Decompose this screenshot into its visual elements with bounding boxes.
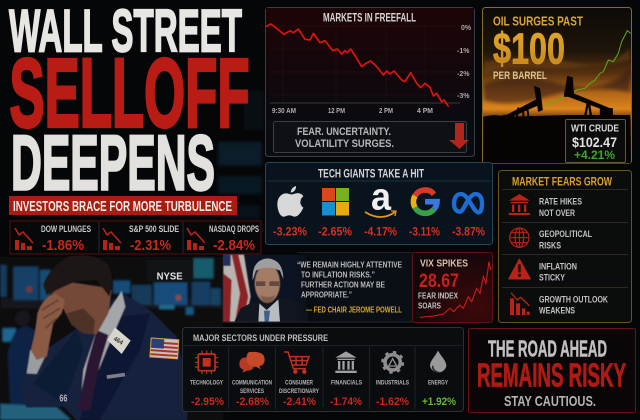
stat: dow: -1.86% <box>42 238 84 254</box>
icon: speech bubbles <box>239 352 265 373</box>
icon: growth falling <box>510 293 530 315</box>
logo: google <box>413 190 437 213</box>
sector: technology: -2.95% <box>191 396 224 408</box>
background: trading floor photo with trader <box>0 255 223 420</box>
title <box>9 0 250 206</box>
sector: industrials: -1.62% <box>376 396 409 408</box>
text: rate hikes <box>539 196 582 219</box>
sector: financials <box>330 380 363 408</box>
tech stock percentages: -4.17% <box>364 224 397 238</box>
subtitle banner: INVESTORS BRACE FOR MORE TURBULENCE <box>13 198 232 215</box>
panel: vix: VIX SPIKES <box>420 258 468 270</box>
icon: bank <box>509 194 530 215</box>
sector: communication services: COMMUNICATION <box>232 380 272 386</box>
label: per barrel: PER BARREL <box>493 70 547 82</box>
text: growth outlook <box>539 294 608 316</box>
sector: technology: TECHNOLOGY <box>190 380 223 386</box>
sector: communication services: SERVICES <box>240 388 264 395</box>
suit <box>234 297 308 322</box>
callout: wti crude: $102.47 <box>572 135 617 150</box>
tech stock percentages: -2.65% <box>318 224 352 238</box>
y axis labels: 0% <box>461 25 472 32</box>
background: faint trading screens behind headline <box>218 90 264 219</box>
stat: s&p 500: -2.31% <box>130 238 171 254</box>
line chart: oil price rising <box>545 31 631 107</box>
sector: energy: +1.92% <box>422 396 456 408</box>
text: geopolitical risks: GEOPOLITICAL <box>539 229 592 240</box>
stat: nasdaq <box>209 224 259 254</box>
icon: falling bars dow <box>15 228 33 250</box>
tech stock percentages: -3.11% <box>409 224 440 238</box>
panel: the road ahead <box>468 328 636 412</box>
stat: s&p 500: S&P 500 SLIDE <box>129 224 179 234</box>
subtitle banner <box>9 196 237 215</box>
tech stock percentages <box>273 224 485 238</box>
x axis labels <box>272 108 433 115</box>
tech stock percentages: -3.87% <box>452 224 485 238</box>
callout: fear and uncertainty: VOLATILITY SURGES. <box>295 138 394 150</box>
text: growth outlook: WEAKENS <box>539 306 575 316</box>
x axis labels: 9:30 AM <box>272 108 296 115</box>
desk <box>0 403 72 420</box>
panel: powell quote: APPROPRIATE.” <box>301 290 352 300</box>
y axis labels: -3% <box>457 93 470 100</box>
panel: markets in freefall <box>266 8 474 156</box>
callout: fear and uncertainty: FEAR. UNCERTAINTY. <box>297 126 391 138</box>
heading: oil surges past: OIL SURGES PAST <box>493 14 583 28</box>
panel: vix: FEAR INDEX <box>418 292 459 300</box>
text: rate hikes: RATE HIKES <box>539 196 582 208</box>
title: DEEPENS <box>11 118 215 206</box>
panel: sectors <box>182 328 464 412</box>
text: growth outlook: GROWTH OUTLOOK <box>539 294 608 306</box>
stat: s&p 500 <box>129 224 179 254</box>
panel: powell quote: TO INFLATION RISKS.” <box>301 270 375 280</box>
panel: vix: 28.67 <box>419 271 459 292</box>
logo: amazon: a <box>371 176 392 218</box>
background trader <box>7 325 37 407</box>
icon: drop <box>430 351 446 372</box>
sector: consumer discretionary: DISCRETIONARY <box>279 388 319 395</box>
price: $100: $100 <box>493 24 565 74</box>
arrow: red down <box>449 123 469 149</box>
icon: shopping cart <box>284 352 309 373</box>
face <box>255 264 280 303</box>
heading: TECH GIANTS TAKE A HIT <box>318 168 424 180</box>
sector: communication services: -2.68% <box>236 396 269 408</box>
tech stock percentages: -3.23% <box>273 224 307 238</box>
icon: financials bank <box>335 351 357 373</box>
sector: consumer discretionary: -2.41% <box>283 396 316 408</box>
y axis labels: -1% <box>457 48 470 55</box>
panel: powell photo <box>223 255 308 322</box>
text: inflation sticky: STICKY <box>539 272 565 284</box>
x axis labels: 4 PM <box>417 108 433 115</box>
icon: american flag sleeve patch <box>149 337 179 359</box>
icon: falling bars nasdaq <box>187 228 205 250</box>
panel: dow, s&p and nasdaq stats <box>10 221 261 254</box>
icon: warning triangle <box>509 259 530 279</box>
text: inflation sticky <box>539 262 577 284</box>
panel: powell quote: FURTHER ACTION MAY BE <box>301 280 386 290</box>
callout: wti crude <box>566 120 626 162</box>
x axis labels: 12 PM <box>328 108 345 115</box>
panel: powell quote: “WE REMAIN HIGHLY ATTENTIVE <box>297 260 403 270</box>
logo: amazon <box>365 176 396 218</box>
panel: the road ahead: STAY CAUTIOUS. <box>504 393 596 410</box>
logo: apple <box>277 186 303 217</box>
trader figure <box>20 255 187 420</box>
panel: tech giants <box>266 162 492 244</box>
panel: oil surges <box>482 8 632 164</box>
logo: meta <box>454 194 482 212</box>
sector: energy <box>422 380 456 408</box>
stat: nasdaq: -2.84% <box>213 238 255 254</box>
icon: oil pumpjacks <box>483 76 631 163</box>
text: inflation sticky: INFLATION <box>539 262 577 272</box>
heading: MARKETS IN FREEFALL <box>323 12 416 24</box>
text: geopolitical risks <box>539 229 592 252</box>
callout: fear and uncertainty <box>274 122 466 152</box>
sector: consumer discretionary <box>279 380 319 408</box>
sector: financials: -1.74% <box>330 396 362 408</box>
x axis labels: 2 PM <box>379 108 393 115</box>
sector: consumer discretionary: CONSUMER <box>285 380 313 386</box>
NYSE sign <box>147 260 193 282</box>
title: SELLOFF <box>10 38 250 148</box>
stat: dow <box>41 224 91 254</box>
sector: energy: ENERGY <box>428 380 448 386</box>
icon: gear <box>383 352 403 372</box>
badge: 464 <box>112 336 125 347</box>
panel: market fears <box>498 170 632 322</box>
sector: communication services <box>232 380 272 408</box>
icon: chip <box>195 351 218 374</box>
NYSE sign: NYSE <box>157 271 183 282</box>
sector: industrials: INDUSTRIALS <box>376 380 409 386</box>
icon: falling bars s&p <box>103 228 121 250</box>
icon: globe <box>510 228 529 247</box>
y axis labels <box>457 25 472 100</box>
sector: technology <box>190 380 224 408</box>
panel: vix: SOARS <box>418 302 442 310</box>
hair <box>253 258 283 281</box>
callout: wti crude: WTI CRUDE <box>571 122 619 134</box>
panel: vix <box>412 252 492 322</box>
y axis labels: -2% <box>457 71 470 78</box>
sector: industrials <box>376 380 409 408</box>
sector: financials: FINANCIALS <box>331 380 363 386</box>
text: rate hikes: NOT OVER <box>539 208 575 219</box>
stat: nasdaq: NASDAQ DROPS <box>209 224 259 234</box>
attribution: — FED CHAIR JEROME POWELL <box>306 306 402 314</box>
callout: wti crude: +4.21% <box>574 150 615 162</box>
panel: powell quote <box>223 252 413 322</box>
logo: microsoft <box>322 188 349 216</box>
text: geopolitical risks: RISKS <box>539 240 561 252</box>
badge <box>107 327 131 354</box>
us flag <box>223 255 251 322</box>
heading: MAJOR SECTORS UNDER PRESSURE <box>193 333 328 344</box>
stat: dow: DOW PLUNGES <box>41 224 91 234</box>
glasses <box>256 281 279 286</box>
line chart: vix spike <box>420 262 491 317</box>
line chart: intraday decline <box>266 24 449 107</box>
background: trading floor photo with trader: 66 <box>59 394 68 405</box>
